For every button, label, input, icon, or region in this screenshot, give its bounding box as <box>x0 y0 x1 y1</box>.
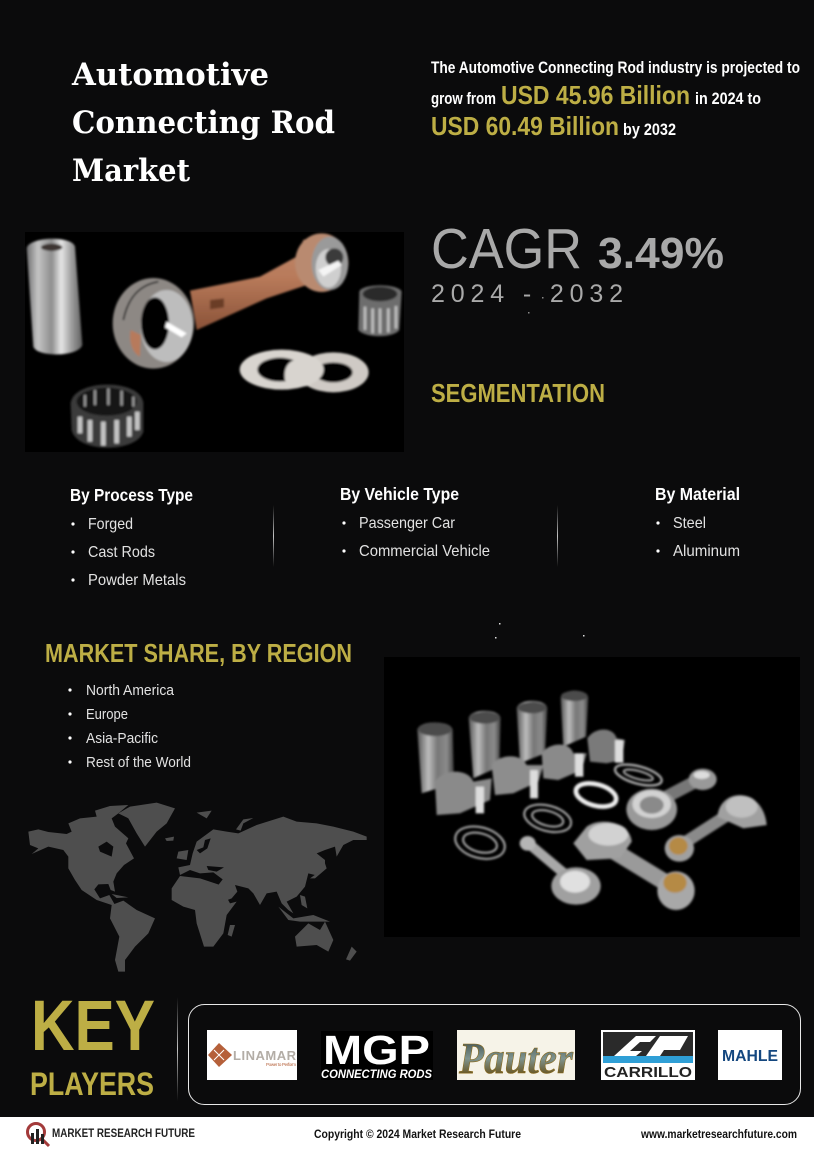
icon: market research future logo <box>28 1124 49 1146</box>
logo: Pauter: Pauter <box>458 1034 574 1083</box>
logo: MGP connecting rods: CONNECTING RODS <box>321 1069 432 1081</box>
Africa <box>172 876 237 947</box>
Novaya Zemlya <box>236 818 253 831</box>
photo: connecting rod kit <box>25 232 404 452</box>
logo: Linamar: LINAMAR <box>233 1048 297 1063</box>
Japan <box>310 858 327 878</box>
North America <box>28 805 134 905</box>
segment: by vehicle type: Passenger Car <box>359 515 456 532</box>
icon: connecting rod <box>113 233 348 369</box>
UK <box>177 850 188 860</box>
market projection text: USD 45.96 Billion <box>501 80 690 110</box>
CAGR figure: 2024 - 2032 <box>431 280 623 308</box>
New Zealand <box>346 947 357 961</box>
key players box <box>188 1004 800 1104</box>
title: Connecting Rod <box>72 105 335 141</box>
CAGR figure <box>431 217 724 308</box>
title: Market <box>72 153 191 189</box>
region list: Asia-Pacific <box>86 730 158 747</box>
market projection text: grow from <box>431 90 496 108</box>
segment: by process type: Forged <box>88 516 133 533</box>
logo: Linamar: Power to Perform <box>266 1062 296 1067</box>
icon: small needle bearing <box>358 285 402 336</box>
Caribbean islands <box>112 894 128 898</box>
CAGR figure: 3.49% <box>598 229 724 278</box>
region list: Rest of the World <box>86 754 191 771</box>
key players heading: KEY <box>31 987 155 1066</box>
segment: by material: Aluminum <box>673 543 740 560</box>
key players heading <box>30 987 155 1102</box>
Eurasia <box>178 817 367 913</box>
footer: Copyright © 2024 Market Research Future <box>314 1127 521 1141</box>
market share heading: MARKET SHARE, BY REGION <box>45 638 352 668</box>
market projection text: in 2024 to <box>695 90 761 108</box>
Philippines <box>300 895 307 908</box>
footer <box>0 1117 814 1150</box>
region list <box>68 682 191 771</box>
logo: CP Carrillo: CARRILLO <box>604 1064 692 1081</box>
region list: North America <box>86 682 175 699</box>
icon: cylinder sleeves <box>417 691 588 793</box>
title <box>71 57 335 189</box>
segment: by vehicle type: Commercial Vehicle <box>359 543 490 560</box>
segment: by material: By Material <box>655 484 740 504</box>
market projection text: USD 60.49 Billion <box>431 111 619 141</box>
segment: by process type: By Process Type <box>70 485 193 505</box>
segment: by material <box>655 484 740 560</box>
logo: CP Carrillo <box>601 1030 695 1081</box>
photo: engine parts set <box>384 657 800 937</box>
segment: by vehicle type <box>340 484 490 560</box>
logo: Mahle <box>718 1030 782 1080</box>
segment: by process type: Cast Rods <box>88 544 155 561</box>
Australia <box>295 922 333 952</box>
Svalbard <box>197 811 212 818</box>
title: Automotive <box>71 57 269 93</box>
logo: Mahle: MAHLE <box>722 1048 778 1065</box>
region list: Europe <box>86 706 128 723</box>
South America <box>110 901 155 972</box>
footer: MARKET RESEARCH FUTURE <box>52 1126 195 1140</box>
Black Sea <box>207 866 224 872</box>
key players heading: PLAYERS <box>30 1066 154 1102</box>
Indonesia <box>278 907 330 922</box>
market projection text: by 2032 <box>623 121 676 139</box>
CAGR figure: CAGR <box>431 217 582 281</box>
logo: MGP connecting rods: MGP <box>323 1027 430 1073</box>
icon: piston rings <box>452 760 664 864</box>
segment: by material: Steel <box>673 515 706 532</box>
segment: by process type: Powder Metals <box>88 572 186 589</box>
Madagascar <box>228 925 235 937</box>
icon: connecting rods <box>520 769 767 910</box>
icon: pistons <box>435 730 625 815</box>
Greenland <box>118 803 175 847</box>
Hudson Bay <box>98 842 113 857</box>
world map <box>28 803 367 972</box>
segment: by process type <box>70 485 193 589</box>
market projection text <box>431 59 800 141</box>
Baltic Sea <box>197 838 211 853</box>
segmentation heading: SEGMENTATION <box>431 378 605 408</box>
icon: large needle bearing <box>71 385 143 448</box>
segment: by vehicle type: By Vehicle Type <box>340 484 459 504</box>
logo: Linamar <box>207 1030 297 1080</box>
Iceland <box>165 837 174 841</box>
icon: piston pin <box>27 239 82 354</box>
icon: thrust washers <box>240 350 369 392</box>
